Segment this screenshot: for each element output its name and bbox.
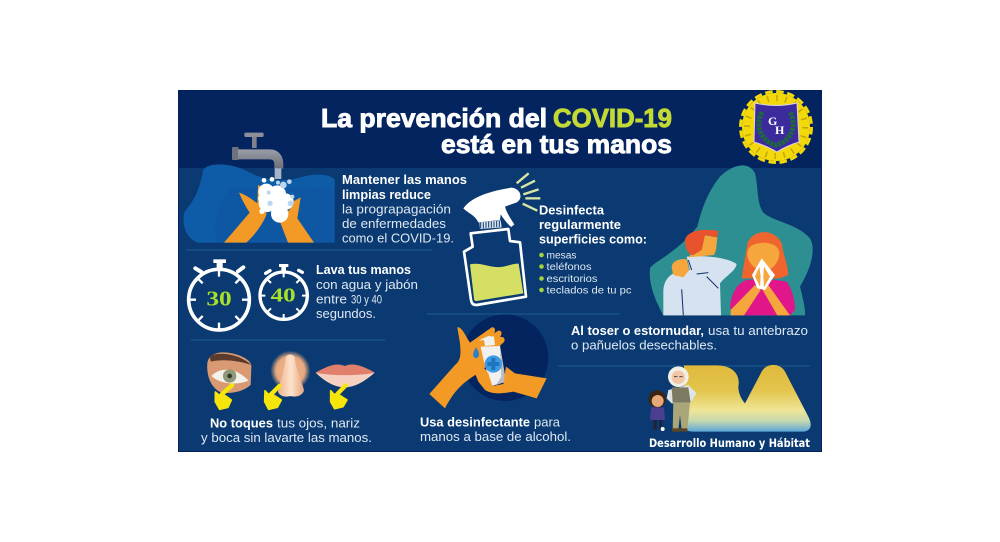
panel: infographic background xyxy=(178,90,822,452)
text block: wash your hands: Lava tus manos xyxy=(316,263,411,277)
icon: hands with sanitizer xyxy=(429,314,548,408)
icon: lips with pointer xyxy=(316,365,375,409)
illustration: coughing man and sneezing woman xyxy=(650,165,813,315)
label: department name: Desarrollo Humano y Hábitat xyxy=(649,436,810,450)
list: surfaces: teclados de tu pc xyxy=(546,286,632,296)
text block: keep hands clean: limpias reduce xyxy=(342,188,431,202)
text block: cough or sneeze xyxy=(571,324,808,352)
list: surfaces: mesas xyxy=(546,250,576,262)
section: do not touch face xyxy=(201,351,375,445)
text block: cough or sneeze: o pañuelos desechables. xyxy=(571,338,717,352)
logo: BA letters xyxy=(684,365,811,432)
text block: do not touch: tus ojos, nariz xyxy=(277,416,360,430)
text block: do not touch xyxy=(201,416,372,445)
title: COVID-19 xyxy=(553,103,672,133)
text block: keep hands clean: la prograpagación xyxy=(342,202,451,216)
text block: disinfect surfaces: regularmente xyxy=(539,218,621,232)
text block: keep hands clean: Mantener las manos xyxy=(342,173,467,187)
text block: keep hands clean: como el COVID-19. xyxy=(342,232,454,246)
icon: institutional seal xyxy=(740,92,812,162)
icon: nose with pointer xyxy=(265,351,310,409)
text block: keep hands clean: de enfermedades xyxy=(342,217,446,231)
text block: use sanitizer: manos a base de alcohol. xyxy=(420,430,571,444)
text block: use sanitizer: para xyxy=(534,416,560,430)
text block: do not touch: No toques xyxy=(210,416,273,430)
text block: cough or sneeze: usa tu antebrazo xyxy=(708,324,808,338)
text block: wash your hands: con agua y jabón xyxy=(316,278,418,292)
icon: institutional seal: G xyxy=(768,114,777,128)
icon: eye with pointer xyxy=(207,352,251,409)
title: está en tus manos xyxy=(441,129,672,159)
section: coughing and sneezing xyxy=(571,165,813,352)
text block: disinfect surfaces xyxy=(539,204,647,246)
text block: use sanitizer: Usa desinfectante xyxy=(420,416,530,430)
text block: keep hands clean xyxy=(342,173,467,246)
text block: disinfect surfaces: Desinfecta xyxy=(539,204,605,218)
section: stopwatches xyxy=(189,259,307,330)
section: hand washing xyxy=(183,133,467,246)
title xyxy=(321,103,672,159)
text block: wash your hands: segundos. xyxy=(316,307,376,321)
section: spray bottle xyxy=(463,173,647,305)
title: La prevención del xyxy=(321,103,547,133)
section: sanitizer xyxy=(420,314,571,444)
text block: disinfect surfaces: superficies como: xyxy=(539,232,647,246)
icon: blue blob background xyxy=(183,164,335,243)
list: surfaces: escritorios xyxy=(546,274,598,285)
icon: faucet xyxy=(232,133,283,179)
text block: wash your hands: 30 y 40 xyxy=(351,292,382,306)
text block: use sanitizer xyxy=(420,416,571,444)
spray rays xyxy=(517,173,540,211)
icon: soapy hands xyxy=(224,177,314,243)
icon: spray bottle xyxy=(463,173,540,305)
text block: do not touch: y boca sin lavarte las manos. xyxy=(201,431,372,445)
text block: cough or sneeze: Al toser o estornudar, xyxy=(571,324,704,338)
text block: wash your hands: entre xyxy=(316,292,347,306)
icon: stopwatch 40 seconds: 40 xyxy=(271,285,296,307)
icon: stopwatch 30 seconds: 30 xyxy=(206,289,232,311)
list: surfaces: teléfonos xyxy=(546,262,592,273)
illustration: elderly man and child xyxy=(649,366,697,432)
section: Buenos Aires logo xyxy=(649,365,811,450)
icon: institutional seal: H xyxy=(775,123,785,137)
text block: wash your hands xyxy=(316,263,418,321)
list: surfaces xyxy=(539,250,632,296)
